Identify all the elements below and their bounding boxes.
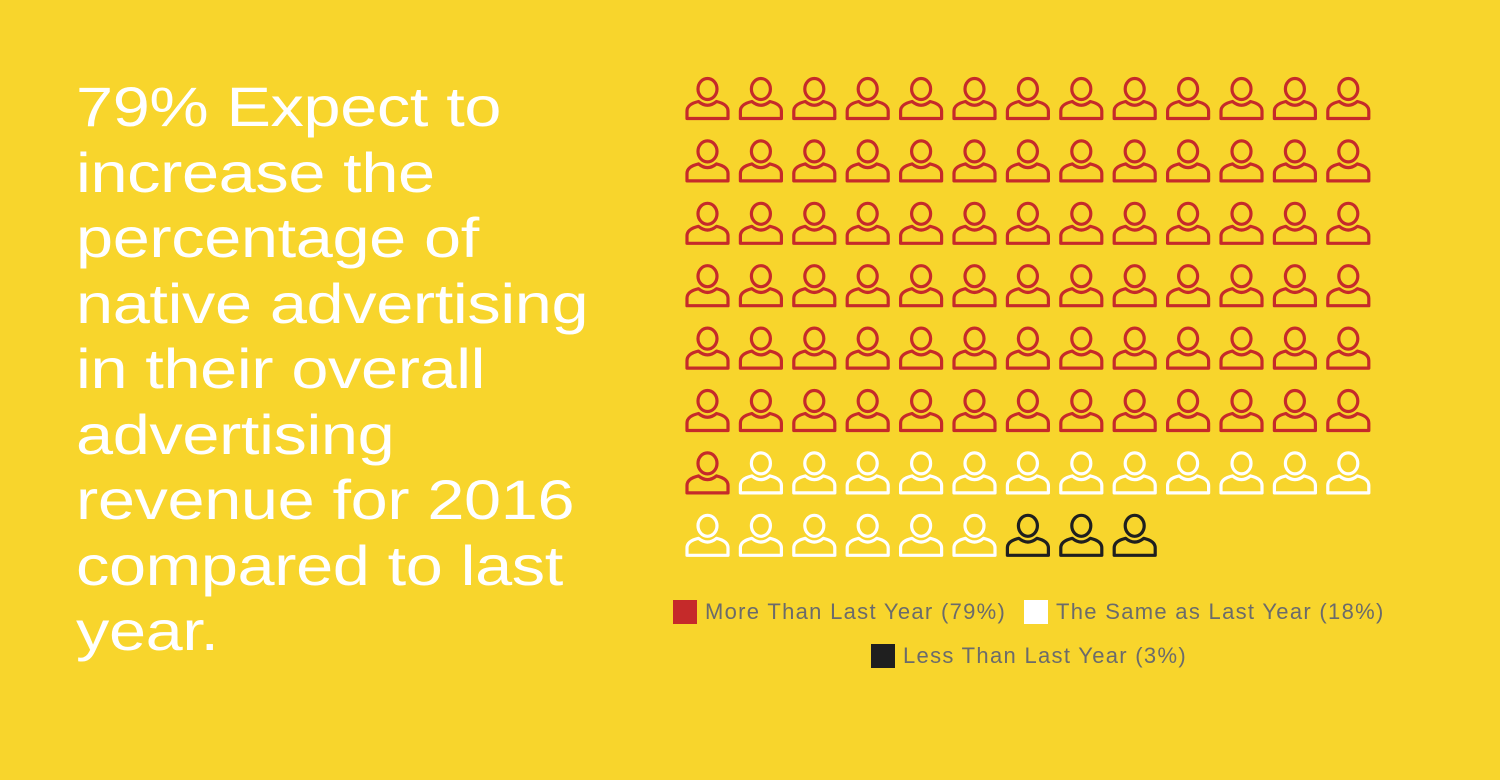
- title: in their overall: [76, 337, 485, 400]
- title: increase the: [76, 140, 435, 204]
- legend: more than last year: More Than Last Year (79%): [705, 599, 1006, 624]
- title: compared to last: [76, 534, 563, 596]
- title: native advertising: [76, 272, 588, 334]
- icons: more than last year (red): [687, 78, 1369, 493]
- title: 79% Expect to: [76, 75, 501, 138]
- icons: less than last year (black): [1007, 515, 1155, 555]
- title: percentage of: [76, 206, 479, 269]
- title: advertising: [76, 402, 394, 466]
- title: year.: [76, 599, 219, 662]
- title: [76, 75, 588, 662]
- icons: same as last year (white): [687, 453, 1369, 555]
- legend: less than last year: Less Than Last Year (3%): [903, 643, 1187, 668]
- legend: same as last year: The Same as Last Year (18%): [1056, 599, 1385, 624]
- title: revenue for 2016: [76, 468, 574, 531]
